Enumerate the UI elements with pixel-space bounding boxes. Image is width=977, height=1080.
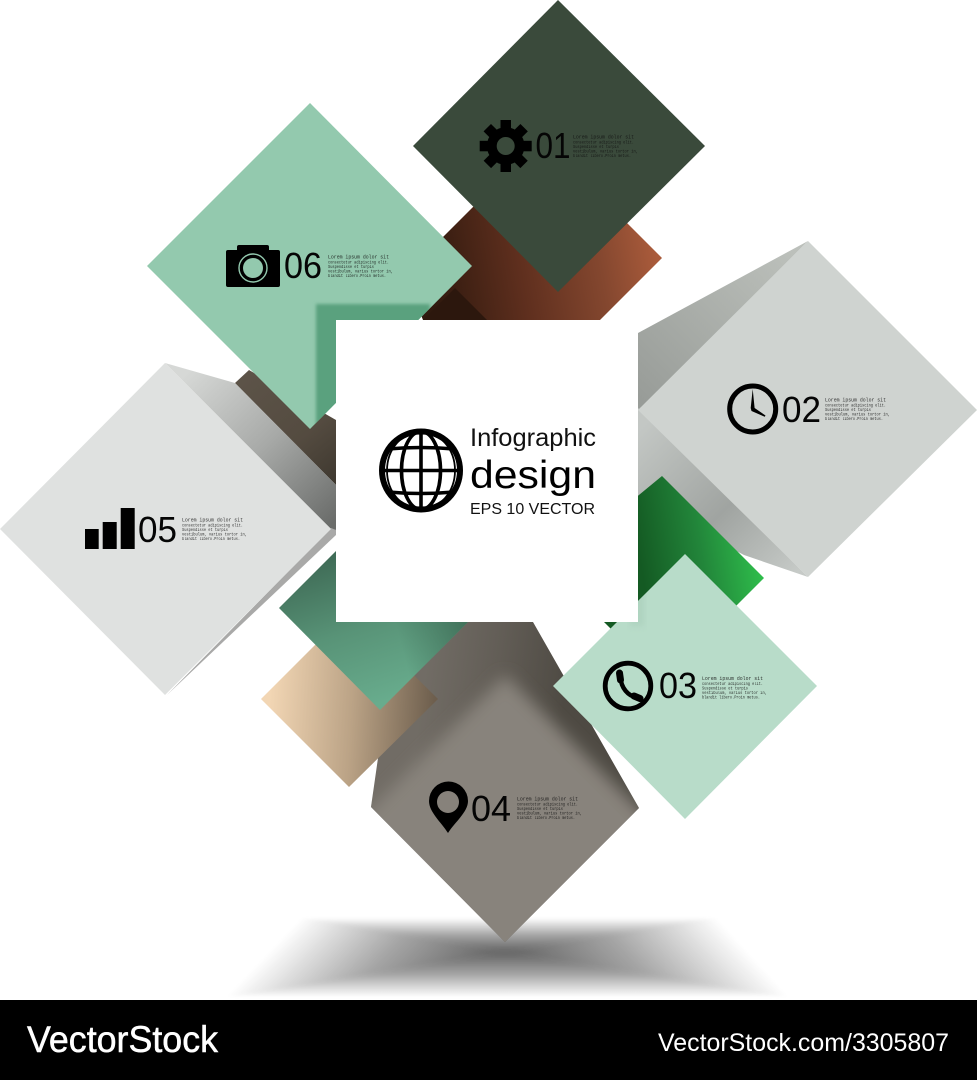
text block 03: Lorem ipsum dolor sit [702, 676, 763, 682]
text block 04: consectetur adipiscing elit. [517, 802, 578, 808]
number 03: 03 [659, 665, 697, 706]
text block 06: Lorem ipsum dolor sit [328, 254, 389, 260]
number 05: 05 [138, 509, 177, 550]
text block 04: blandit libero.Proin metus. [517, 816, 575, 821]
ground shadow [225, 918, 790, 997]
teal back panel [279, 537, 520, 710]
number 06: 06 [284, 245, 322, 286]
text block 05: blandit libero.Proin metus. [182, 537, 240, 542]
panel 05 [0, 363, 336, 695]
text block 01: Suspendisse et turpis [573, 145, 619, 150]
title: design: design [470, 454, 596, 497]
panel 02 [638, 241, 977, 577]
tan back panel [261, 611, 438, 787]
text block 03: blandit libero.Proin metus. [702, 696, 760, 700]
text block 01: blandit libero.Proin metus. [573, 154, 631, 159]
text block 05: Suspendisse et turpis [182, 528, 228, 533]
icon: map pin [429, 782, 468, 833]
footer url: VectorStock.com/3305807 [658, 1029, 949, 1057]
text block 05: vestibulum, varius tortor in, [182, 532, 247, 538]
panel 01 [413, 0, 705, 292]
number 04: 04 [471, 788, 511, 829]
text block 03: consectetur adipiscing elit. [702, 682, 763, 687]
number 01: 01 [536, 125, 570, 166]
text block 02: vestibulum, varius tortor in, [825, 412, 890, 418]
text block 02: blandit libero.Proin metus. [825, 417, 883, 422]
text block 03: Suspendisse et turpis [702, 686, 748, 692]
number 02: 02 [782, 389, 821, 430]
footer logo: VectorStock [27, 1019, 218, 1060]
footer bar [0, 1000, 977, 1080]
text block 06: consectetur adipiscing elit. [328, 260, 389, 266]
text block 05: Lorem ipsum dolor sit [182, 518, 243, 524]
text block 02: Lorem ipsum dolor sit [825, 398, 886, 404]
text block 03: vestibulum, varius tortor in, [702, 691, 767, 696]
panel 03 [553, 540, 817, 819]
text block 01: consectetur adipiscing elit. [573, 140, 634, 146]
text block 01: vestibulum, varius tortor in, [573, 150, 638, 154]
icon: globe [381, 431, 461, 510]
text block 04 [517, 796, 582, 821]
text block 04: vestibulum, varius tortor in, [517, 812, 582, 816]
text block 06: vestibulum, varius tortor in, [328, 270, 393, 274]
text block 05 [182, 518, 247, 542]
text block 04: Lorem ipsum dolor sit [517, 796, 578, 802]
icon: camera [226, 245, 280, 287]
text block 06 [328, 254, 393, 279]
icon: phone [605, 663, 651, 709]
panel 04 [371, 622, 639, 942]
text block 06: blandit libero.Proin metus. [328, 274, 386, 279]
brown back panel [415, 138, 662, 320]
text block 02: consectetur adipiscing elit. [825, 404, 886, 408]
icon: signal bars [85, 508, 135, 549]
green back panel [560, 476, 764, 642]
text block 02: Suspendisse et turpis [825, 408, 871, 413]
title: Infographic: Infographic [470, 424, 596, 452]
subtitle: EPS 10 VECTOR [470, 501, 595, 518]
text block 01: Lorem ipsum dolor sit [573, 134, 634, 140]
text block 02 [825, 398, 890, 422]
text block 01 [573, 134, 638, 159]
text block 04: Suspendisse et turpis [517, 807, 563, 812]
icon: clock [730, 386, 776, 432]
icon: gear [480, 120, 532, 172]
center white panel [336, 320, 638, 622]
text block 06: Suspendisse et turpis [328, 265, 374, 270]
text block 03 [702, 676, 767, 700]
text block 05: consectetur adipiscing elit. [182, 524, 243, 528]
panel 06 [147, 103, 472, 445]
umber back panel [235, 370, 336, 485]
